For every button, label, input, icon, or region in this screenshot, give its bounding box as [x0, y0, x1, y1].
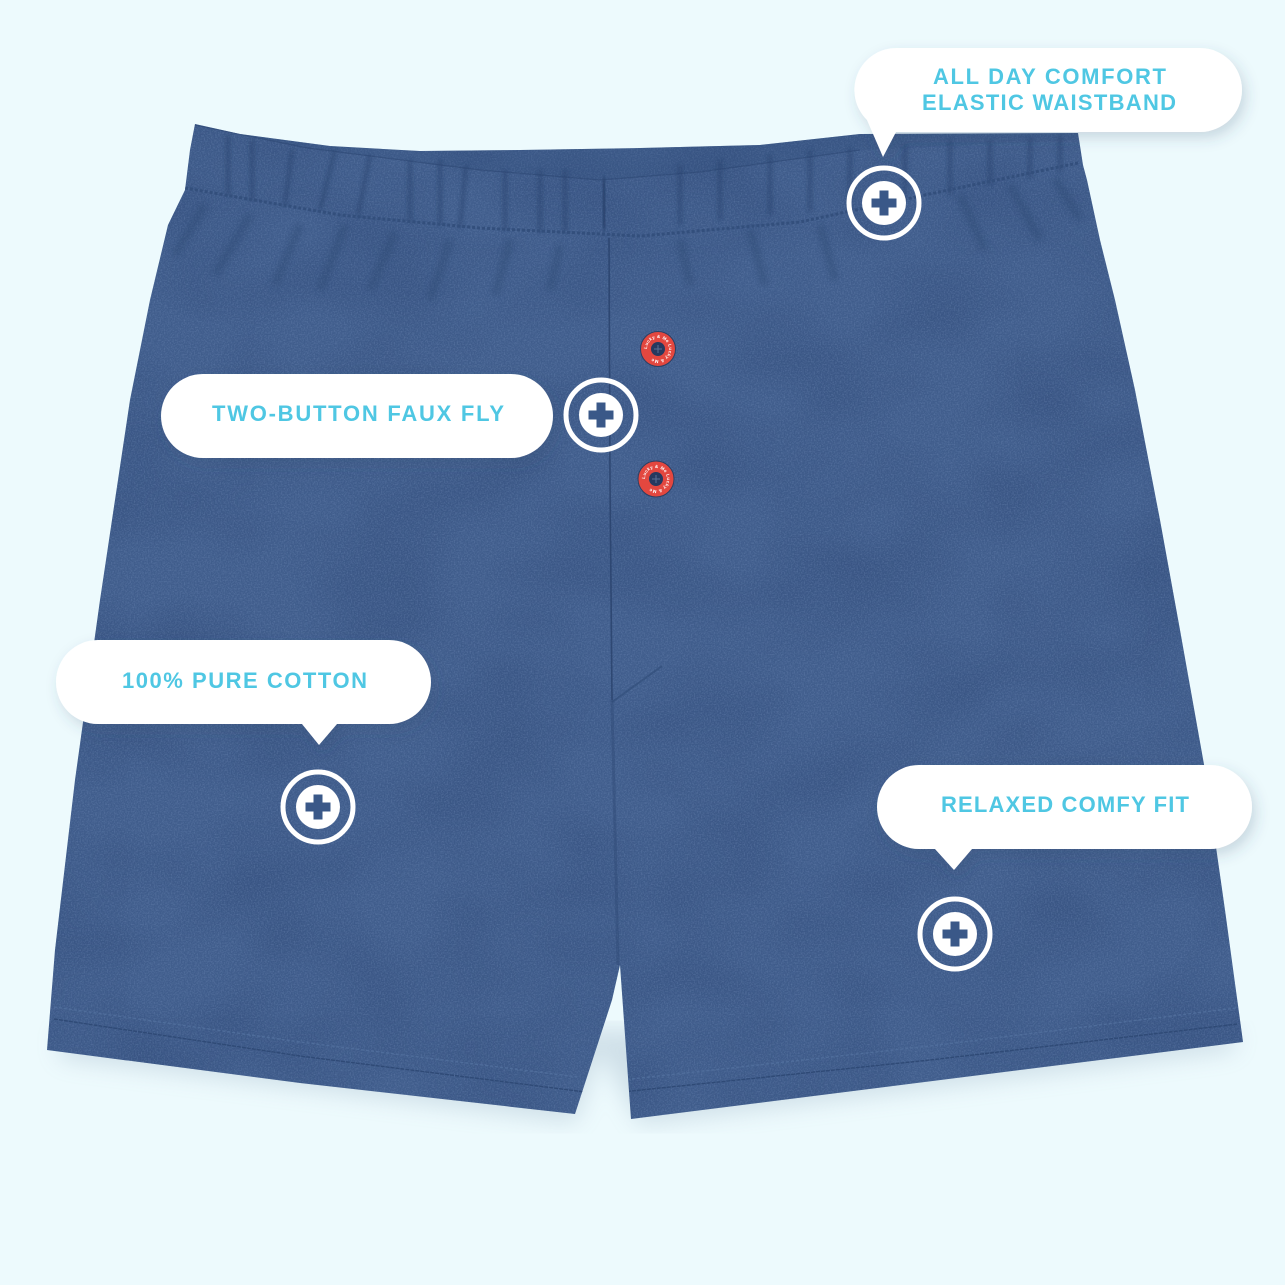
marker: waistband: [849, 168, 919, 238]
callout text: RELAXED COMFY FIT: [941, 792, 1190, 817]
callout text line 2: ELASTIC WAISTBAND: [922, 90, 1176, 115]
waistband top edge: [195, 125, 860, 180]
garment ground shadow: [60, 1030, 1235, 1124]
button: upper: Lucky & Me Lucky & Me: [644, 334, 672, 364]
callout text line 1: ALL DAY COMFORT: [933, 64, 1167, 89]
centre seam fold: [603, 178, 605, 230]
hem stitching: [54, 1007, 1238, 1092]
button: lower: [638, 460, 674, 498]
waistband wrinkles below seam: [175, 178, 1080, 300]
crotch shade: [612, 700, 618, 965]
waistband gathers: [228, 135, 1060, 232]
callout: faux fly: [161, 374, 553, 458]
button: lower: Lucky & Me Lucky & Me: [642, 464, 670, 494]
callout text: 100% PURE COTTON: [122, 668, 367, 693]
waistband top inner band: [393, 134, 854, 152]
marker: faux fly: [566, 380, 636, 450]
callout: relaxed fit: [877, 765, 1252, 870]
shorts garment: [30, 110, 1260, 1130]
garment body: [30, 110, 1260, 1130]
fly seam: [609, 238, 612, 700]
marker: cotton: [283, 772, 353, 842]
callout text: TWO-BUTTON FAUX FLY: [212, 401, 504, 426]
marker: relaxed fit: [920, 899, 990, 969]
callout: pure cotton: [56, 640, 431, 745]
fly base diagonal: [612, 666, 662, 702]
waistband stitching: [185, 163, 1078, 236]
callout: elastic waistband: [854, 48, 1242, 157]
